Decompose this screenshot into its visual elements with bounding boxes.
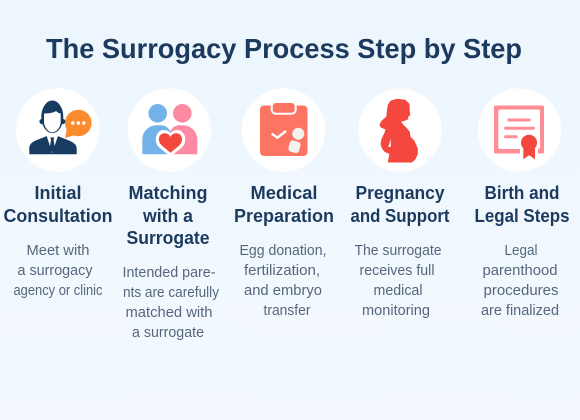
icon: two parents with heart <box>128 88 211 172</box>
icon: clipboard with check and figure <box>242 88 325 172</box>
description: Intended pare- <box>122 265 216 281</box>
description <box>354 243 442 319</box>
description: medical <box>374 283 422 299</box>
description: a surrogate <box>132 325 204 341</box>
heading: Birth and <box>484 183 560 203</box>
panel: initial consultation <box>4 88 112 299</box>
description: transfer <box>264 303 311 319</box>
heading: Pregnancy <box>356 183 444 203</box>
description <box>240 243 326 319</box>
description: The surrogate <box>354 243 442 259</box>
heading: Legal Steps <box>474 206 570 226</box>
heading <box>234 183 334 226</box>
heading: Initial <box>34 183 82 203</box>
description: Legal <box>504 243 538 259</box>
heading <box>474 183 570 226</box>
panel: matching with a surrogate <box>122 88 220 341</box>
description: procedures <box>484 283 558 299</box>
description: a surrogacy <box>18 263 93 279</box>
description: agency or clinic <box>14 283 102 299</box>
title: The Surrogacy Process Step by Step <box>46 33 522 64</box>
description: Meet with <box>26 243 90 259</box>
description: fertilization, <box>244 263 320 279</box>
heading: with a <box>142 206 194 226</box>
description: Egg donation, <box>240 243 326 259</box>
description: parenthood <box>482 263 558 279</box>
description: matched with <box>126 305 212 321</box>
description: and embryo <box>244 283 322 299</box>
heading <box>350 183 450 226</box>
panel: birth and legal steps <box>474 88 570 319</box>
description: are finalized <box>481 303 559 319</box>
heading: Preparation <box>234 206 334 226</box>
heading: Surrogate <box>126 228 210 248</box>
heading: and Support <box>350 206 450 226</box>
heading: Medical <box>250 183 318 203</box>
panel: pregnancy and support <box>350 88 450 319</box>
heading: Matching <box>128 183 208 203</box>
description <box>481 243 559 319</box>
description <box>122 265 220 341</box>
heading <box>126 183 210 248</box>
icon: consultant with speech bubble <box>16 88 99 172</box>
heading: Consultation <box>4 206 112 226</box>
heading <box>4 183 112 226</box>
description <box>14 243 102 299</box>
description: receives full <box>360 263 434 279</box>
panel: medical preparation <box>234 88 334 319</box>
icon: pregnant silhouette <box>358 88 442 172</box>
description: monitoring <box>362 303 430 319</box>
icon: certificate with seal <box>478 88 561 172</box>
description: nts are carefully <box>123 285 220 301</box>
